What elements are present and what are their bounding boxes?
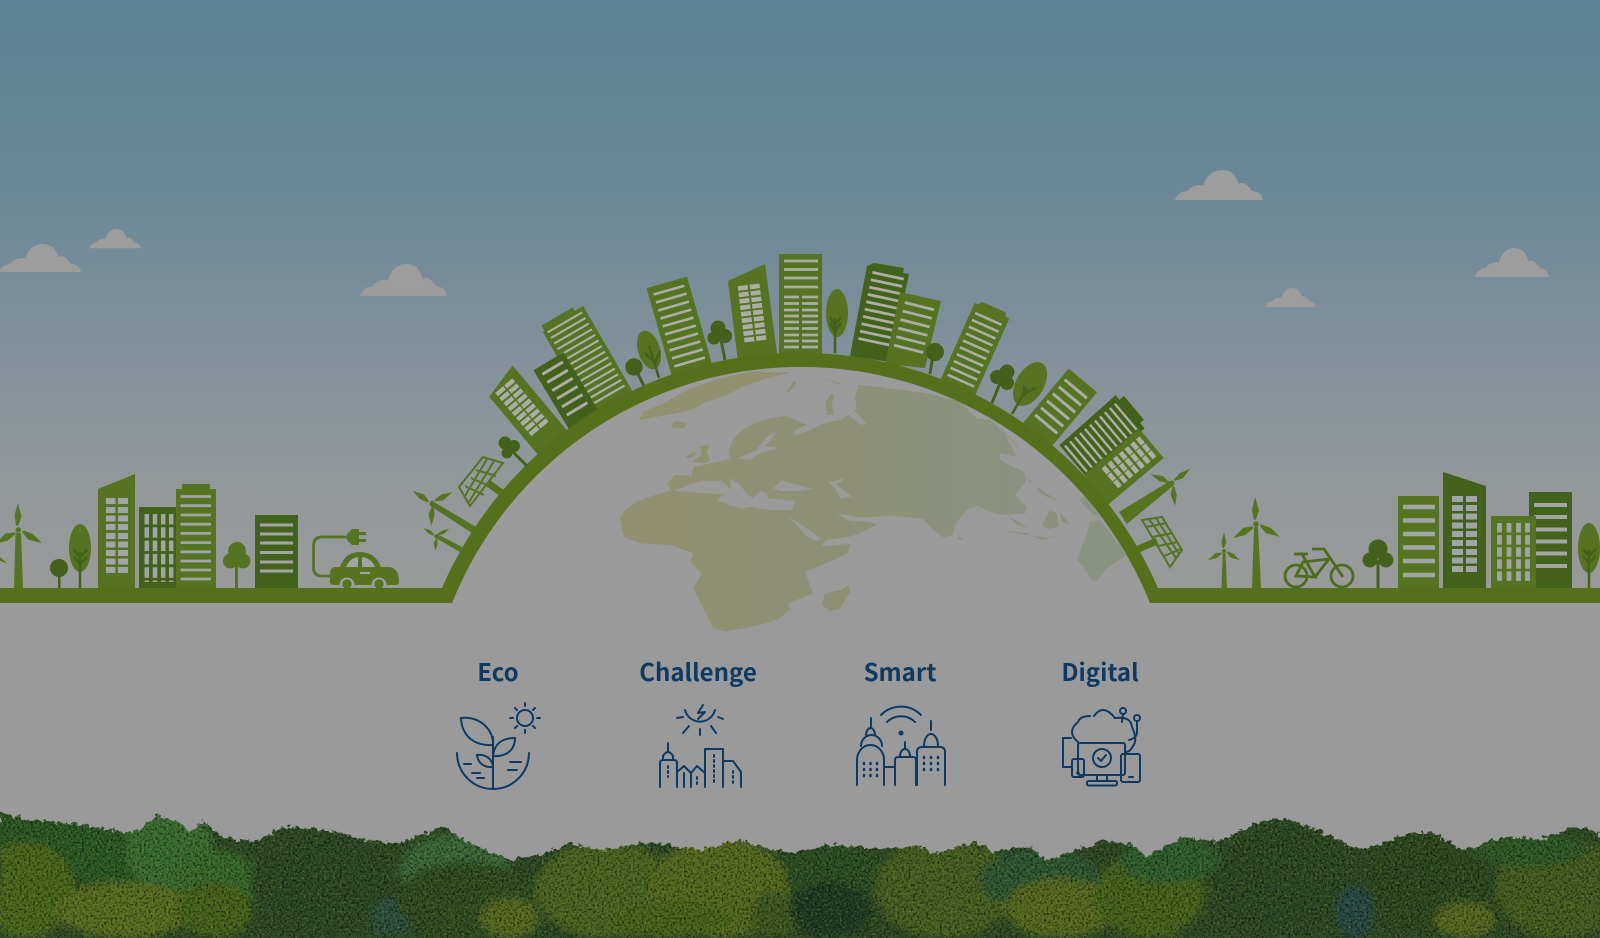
wind turbine blade fragment [0,557,7,563]
tree: round [926,343,944,374]
forest treeline [0,800,1600,938]
building: tall striped [540,303,636,421]
left skyline [0,474,399,589]
Australia [1077,497,1127,582]
tree: oval top [826,289,848,353]
icon: eco plant and sun [457,703,540,789]
building: dark striped [1058,391,1148,477]
tree masses [0,810,1600,938]
city on arc: buildings, trees, turbines, solar [0,254,1600,603]
Arctic islands [785,378,847,415]
building: striped light [1398,496,1439,588]
cloud [89,229,141,248]
wind turbine [0,502,44,588]
tree: oval [633,328,665,378]
Madagascar [822,585,850,611]
tree: oval tilted [1006,356,1054,414]
heading: Digital: Digital [1061,653,1139,688]
icon: digital cloud and devices [1063,708,1140,786]
globe disc [451,367,1149,603]
building: stripes [647,277,713,380]
continents [620,372,1127,632]
building: centre tower [779,254,822,358]
building: grid light [1491,516,1536,588]
solar panel: right [1136,517,1182,567]
tree: cluster [1362,540,1394,588]
wind turbine: right [1119,452,1203,524]
building: light grid [1084,429,1164,504]
icon: smart city and wifi [857,707,945,785]
cloud [0,244,81,272]
Southeast Asia islands [957,427,1070,540]
tree: dark cluster [990,364,1014,403]
cloud [360,264,447,296]
building: dark striped [1529,492,1572,588]
heading: Eco: Eco [477,653,519,688]
wind turbine small [1206,532,1241,588]
tree: dark cluster [708,320,732,360]
ground background [0,603,1600,938]
tree: round [50,559,68,588]
tree: arc left dark [498,436,527,466]
building: dark capped [850,263,909,362]
cloud [1175,170,1263,200]
icon: bicycle [1285,549,1353,587]
tree: round [625,358,644,386]
building: slanted centre [728,264,781,362]
building: dark grid [139,507,176,588]
tree: cluster [223,542,250,588]
forest base [0,800,1600,938]
building: capped striped [938,299,1011,402]
wind turbine: left large [409,473,476,533]
building: striped capped [176,484,216,588]
heading: Smart: Smart [864,653,936,688]
Iceland [671,421,687,428]
wind turbine: left small [421,516,464,553]
tree: oval [1578,523,1600,588]
solar panel: left [459,457,503,506]
labels and icons [477,653,1139,688]
wind turbine large [1229,495,1282,588]
British Isles [685,444,710,463]
building: dark striped [255,515,298,588]
building: slanted [98,474,135,588]
ring: arc and ground [0,353,1600,603]
Greenland [639,372,792,420]
icon: challenge sun and city [660,705,741,787]
right skyline [1206,472,1600,588]
sky background [0,0,1600,610]
cloud [1475,248,1549,277]
globe with world map [526,367,1126,632]
clouds [0,170,1549,307]
tree: oval [69,524,91,588]
building: slanted dark [1443,472,1486,588]
icon: electric car and plug [314,529,399,589]
building: striped [1020,369,1097,451]
seas [673,407,867,542]
heading: Challenge: Challenge [639,653,757,688]
building: slanted left [483,365,573,462]
forest backing [0,822,1600,938]
cloud [1265,288,1316,307]
building: dark front [534,352,601,432]
building: light overlap [885,292,941,368]
